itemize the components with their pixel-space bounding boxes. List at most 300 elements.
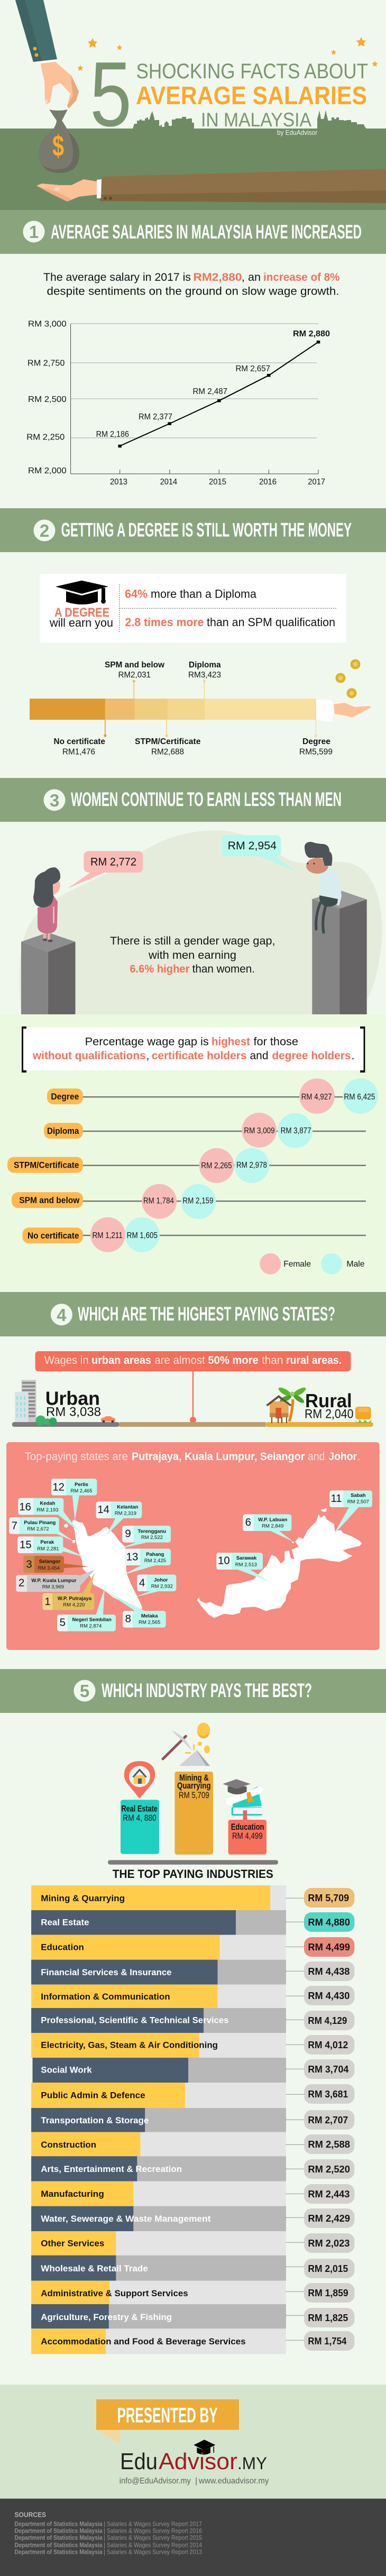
intro text: average salary: [43, 271, 339, 298]
row: arts, entertainment and recreation: Arts, Entertainment & Recreation: [41, 2164, 182, 2174]
panel: percentage wage gap note: highest: [212, 1035, 250, 1048]
callout: Selangor: RM 3,454: [38, 1565, 60, 1571]
callout: W.P. Putrajaya: 1: [44, 1596, 51, 1608]
chart: salary by qualification bar: [30, 659, 371, 757]
callout: Sabah: 11: [330, 1493, 342, 1505]
callout: W.P. Labuan: [243, 1514, 293, 1542]
callout: Pahang: RM 2,425: [144, 1558, 166, 1564]
row: agriculture, forestry and fishing: Agriculture, Forestry & Fishing: [41, 2312, 172, 2322]
label: rural salary: RM 2,040: [305, 1407, 353, 1421]
text: contact details: info@EduAdvisor.my: [120, 2477, 191, 2486]
text: gender wage gap: with men earning: [148, 949, 236, 961]
icon: city buildings: [15, 1380, 57, 1426]
row: water, sewerage and waste management: RM 2,429: [308, 2213, 350, 2224]
labels: qualification salaries: No certificate: [54, 737, 105, 746]
row: education: Education: [41, 1942, 84, 1952]
text: source list: |: [104, 2549, 105, 2556]
row: social work: Social Work: [41, 2065, 92, 2075]
callout: W.P. Labuan: W.P. Labuan: [258, 1517, 287, 1523]
panel: percentage wage gap note: [22, 1026, 365, 1072]
labels: qualification salaries: [54, 661, 333, 757]
row: agriculture, forestry and fishing: [31, 2304, 354, 2329]
banner: presented by: PRESENTED BY: [117, 2404, 218, 2427]
text: 64 percent more: 64%: [125, 587, 148, 600]
bar chart: top paying industries: [31, 1885, 354, 2354]
row: STPM/certificate: RM 2,978: [236, 1161, 267, 1170]
intro text: average salary: RM2,880: [194, 271, 242, 283]
callout: Melaka: RM 2,565: [139, 1620, 160, 1626]
callout: Pulau Pinang: Pulau Pinang: [24, 1520, 56, 1526]
row: diploma: [44, 1113, 313, 1148]
row: transportation and storage: Transportation & Storage: [41, 2115, 149, 2125]
callout: Sarawak: 10: [218, 1555, 230, 1567]
podium bar: mining and quarrying: [174, 1772, 213, 1855]
callout: Terengganu: Terengganu: [138, 1528, 166, 1534]
row: electricity, gas, steam and air conditioning: [31, 2033, 354, 2058]
row: wholesale and retail trade: RM 2,015: [308, 2263, 348, 2274]
callout: Kelantan: Kelantan: [117, 1505, 139, 1510]
text: top-paying states: Putrajaya, Kuala Lumpur, Selangor: [132, 1450, 305, 1463]
labels: qualification salaries: RM3,423: [188, 671, 221, 680]
icon: left pillar: [21, 932, 75, 1014]
line chart: average salary by year: RM 2,880: [293, 329, 330, 338]
row: accommodation and food and beverage services: RM 1,754: [308, 2335, 347, 2346]
diagram: urban and rural scene: [12, 1371, 373, 1427]
icon: city skyline: [133, 110, 366, 129]
callout: Perlis: 12: [52, 1481, 65, 1493]
text: source list: Salaries & Wages Survey Report 2017: [107, 2520, 202, 2528]
text: source list: Salaries & Wages Survey Report 2014: [107, 2542, 202, 2549]
row: manufacturing: RM 2,443: [308, 2188, 350, 2199]
label: rural salary: [305, 1390, 353, 1421]
row: social work: [33, 2058, 354, 2083]
row: electricity, gas, steam and air conditioning: Electricity, Gas, Steam & Air Conditioning: [41, 2040, 218, 2050]
line chart: average salary by year: RM 2,500: [28, 395, 67, 404]
row: professional, scientific and technical services: RM 4,129: [308, 2015, 347, 2026]
callout: Kedah: Kedah: [40, 1501, 56, 1507]
row: information and communication: RM 4,430: [308, 1990, 350, 2001]
row: other services: RM 2,023: [308, 2238, 350, 2249]
callout: urban vs rural wages: 50% more: [208, 1354, 259, 1367]
callout: Sabah: RM 2,507: [347, 1499, 369, 1505]
row: STPM/certificate: [7, 1148, 269, 1183]
chart: salary by gender and qualification: [7, 1078, 378, 1275]
row: real estate: Real Estate: [41, 1918, 89, 1928]
panel: percentage wage gap note: without qualifications: [32, 1049, 146, 1062]
text: contact details: [120, 2477, 269, 2486]
section 3 heading: [0, 778, 386, 822]
legend: Male: [347, 1260, 365, 1269]
icon: village house: [266, 1395, 292, 1423]
callout: Melaka: 8: [125, 1613, 131, 1625]
row: arts, entertainment and recreation: [31, 2156, 354, 2181]
text: top-paying states: [25, 1450, 360, 1463]
callout: Pahang: 13: [126, 1552, 138, 1563]
row: financial services and insurance: Financial Services & Insurance: [41, 1967, 171, 1977]
text: top-paying states: Top-paying states are: [25, 1450, 128, 1463]
callout: Negeri Sembilan: RM 2,874: [80, 1624, 102, 1629]
callout: Pahang: Pahang: [146, 1552, 164, 1557]
line chart: average salary by year: 2015: [209, 478, 226, 487]
row: transportation and storage: RM 2,707: [308, 2114, 348, 2125]
icon: car: [101, 1416, 115, 1423]
text: source list: Salaries & Wages Survey Report 2016: [107, 2527, 202, 2535]
icon: right pillar: [312, 890, 367, 1014]
text: a degree will earn you: A DEGREE: [54, 606, 109, 620]
callout: Pulau Pinang: [9, 1517, 73, 1541]
intro text: average salary: , an: [242, 271, 261, 283]
row: financial services and insurance: [31, 1960, 354, 1985]
callout: Kelantan: RM 2,319: [115, 1511, 136, 1517]
label: urban salary: [45, 1388, 101, 1419]
icon: upper arm and hand: [15, 0, 79, 108]
callout: Perlis: Perlis: [75, 1482, 88, 1488]
podium bar: real estate: Real Estate: [122, 1804, 158, 1814]
row: transportation and storage: [31, 2108, 354, 2132]
text: top-paying states: and: [308, 1450, 325, 1463]
callout: urban vs rural wages: Wages in: [44, 1354, 89, 1367]
callout: Selangor: [23, 1556, 89, 1573]
callout: Kedah: RM 2,193: [36, 1507, 59, 1513]
callout: W.P. Putrajaya: W.P. Putrajaya: [58, 1596, 92, 1601]
panel: percentage wage gap note: certificate holders: [152, 1049, 247, 1062]
map: East Malaysia with callouts: [197, 1490, 372, 1618]
text: 64 percent more: more than a Diploma: [151, 587, 257, 600]
text: source list: Department of Statistics Malaysia: [15, 2549, 103, 2556]
labels: qualification salaries: Diploma: [189, 661, 221, 670]
row: SPM and below: RM 1,784: [143, 1196, 174, 1205]
labels: qualification salaries: Degree: [302, 737, 330, 746]
callout: Kelantan: [96, 1501, 142, 1535]
callout: Negeri Sembilan: Negeri Sembilan: [72, 1617, 112, 1622]
callout: Sarawak: Sarawak: [236, 1555, 257, 1561]
row: degree: [47, 1078, 378, 1114]
row: no certificate: RM 1,605: [127, 1231, 158, 1240]
panel: percentage wage gap note: ,: [146, 1049, 149, 1062]
legend: [260, 1253, 365, 1275]
labels: qualification salaries: SPM and below: [105, 661, 165, 670]
panel: percentage wage gap note: for those: [254, 1035, 298, 1048]
line chart: average salary by year: [26, 320, 330, 487]
row: construction: RM 2,588: [308, 2139, 350, 2150]
line chart: average salary by year: RM 2,000: [28, 466, 67, 475]
line chart: average salary by year: RM 2,250: [26, 433, 65, 442]
icon: books and graduation cap: [223, 1779, 262, 1820]
legend: Female: [283, 1260, 311, 1269]
icon: graduation cap: [56, 581, 108, 604]
panel: percentage wage gap note: .: [351, 1049, 354, 1062]
callout: Negeri Sembilan: 5: [60, 1617, 66, 1628]
row: real estate: RM 4,880: [308, 1917, 350, 1928]
section 4 heading: 4: [57, 1305, 67, 1325]
label: urban salary: RM 3,038: [46, 1405, 101, 1419]
podium: top three industries: [108, 1723, 278, 1865]
callout: Johor: Johor: [154, 1577, 168, 1583]
callout: Melaka: Melaka: [141, 1614, 158, 1619]
text: gender wage gap: 6.6% higher: [130, 962, 190, 975]
row: water, sewerage and waste management: Water, Sewerage & Waste Management: [41, 2214, 211, 2224]
row: mining and quarrying: Mining & Quarrying: [41, 1893, 125, 1903]
section 2 heading: 2: [40, 521, 49, 540]
row: diploma: Diploma: [47, 1126, 79, 1136]
line chart: average salary by year: RM 3,000: [28, 320, 67, 329]
callout: female salary: [68, 851, 143, 888]
callout: urban vs rural wages: than: [262, 1354, 283, 1367]
podium bar: real estate: [121, 1800, 159, 1854]
callout: Pahang: [123, 1548, 171, 1575]
text: a degree will earn you: [49, 606, 113, 629]
podium bar: education: Education: [231, 1822, 264, 1832]
row: professional, scientific and technical services: [31, 2008, 354, 2033]
callout: Sarawak: [216, 1553, 269, 1582]
section 2 heading: [0, 508, 386, 552]
text: gender wage gap: than women.: [192, 962, 255, 975]
row: diploma: RM 3,009: [244, 1126, 275, 1135]
callout: Pulau Pinang: RM 2,672: [27, 1526, 49, 1532]
text: top-paying states: .: [357, 1450, 360, 1463]
row: degree: RM 4,927: [301, 1093, 332, 1102]
labels: qualification salaries: RM5,599: [299, 748, 333, 757]
row: degree: Degree: [51, 1092, 79, 1102]
row: SPM and below: SPM and below: [19, 1195, 80, 1205]
text: source list: Department of Statistics Malaysia: [15, 2520, 103, 2528]
line chart: average salary by year: 2013: [110, 478, 127, 487]
banner: presented by: [96, 2399, 239, 2444]
text: source list: |: [104, 2542, 105, 2549]
callout: W.P. Labuan: RM 2,849: [262, 1523, 283, 1529]
row: other services: [31, 2231, 354, 2256]
labels: qualification salaries: RM2,031: [118, 671, 151, 680]
label: rural salary: Rural: [305, 1390, 352, 1411]
callout: Perak: RM 2,281: [37, 1546, 59, 1552]
row: administrative and support services: Administrative & Support Services: [41, 2288, 188, 2298]
section 3 heading: 3: [50, 791, 59, 810]
row: construction: Construction: [41, 2140, 96, 2150]
section 1 heading: 1: [29, 222, 39, 242]
callout: Perlis: RM 2,465: [70, 1488, 93, 1494]
callout: Selangor: Selangor: [39, 1559, 61, 1565]
callout: urban vs rural wages: rural areas.: [286, 1354, 342, 1367]
hero panel: [0, 0, 386, 210]
panel: gender wage gap illustration: [0, 830, 386, 1292]
row: real estate: [31, 1910, 354, 1935]
text: source list: Salaries & Wages Survey Report 2013: [107, 2549, 202, 2556]
hero ground: [0, 129, 386, 210]
row: public admin and defence: Public Admin & Defence: [41, 2091, 145, 2101]
row: construction: [31, 2132, 354, 2156]
text: contact details: www.eduadvisor.my: [198, 2477, 269, 2486]
row: public admin and defence: [31, 2083, 354, 2108]
intro text: average salary: despite sentiments on the ground on slow wage growth.: [47, 285, 339, 298]
row: social work: RM 3,704: [308, 2064, 349, 2075]
icon: corn crop: [354, 1406, 372, 1423]
row: wholesale and retail trade: Wholesale & Retail Trade: [41, 2263, 148, 2274]
row: degree: RM 6,425: [344, 1093, 375, 1102]
line chart: average salary by year: 2014: [160, 478, 178, 487]
logo: EduAdvisor.my: Advisor: [159, 2449, 237, 2474]
row: information and communication: Information & Communication: [41, 1992, 170, 2002]
row: SPM and below: [12, 1184, 216, 1219]
section 4 heading: [0, 1292, 386, 1336]
heading: sources: SOURCES: [15, 2510, 46, 2518]
text: gender wage gap: There is still a gender wage gap,: [110, 934, 275, 947]
row: no certificate: No certificate: [27, 1231, 79, 1241]
byline: by EduAdvisor: [277, 129, 317, 136]
callout: Perlis: [51, 1479, 97, 1520]
icon: palm tree: [277, 1386, 307, 1422]
text: 2.8 times more: than an SPM qualification: [207, 616, 335, 629]
callout: W.P. Kuala Lumpur: 2: [19, 1577, 24, 1589]
text: gender wage gap: [110, 934, 275, 975]
row: information and communication: [31, 1985, 354, 2008]
podium bar: mining and quarrying: Quarrying: [177, 1781, 210, 1791]
callout: Perak: Perak: [40, 1539, 54, 1545]
text: source list: Department of Statistics Malaysia: [15, 2534, 103, 2542]
row: accommodation and food and beverage services: [31, 2329, 354, 2354]
icon: pickaxe, mountain and gold: [163, 1723, 210, 1766]
callout: Terengganu: RM 2,522: [141, 1535, 163, 1541]
line chart: average salary by year: RM 2,377: [139, 412, 172, 421]
icon: money bag: $: [52, 129, 64, 162]
callout: W.P. Kuala Lumpur: [16, 1570, 95, 1592]
callout: Melaka: [107, 1592, 166, 1628]
row: no certificate: [22, 1217, 160, 1252]
callout: Kelantan: 14: [97, 1504, 109, 1516]
row: financial services and insurance: RM 4,438: [308, 1966, 350, 1977]
text: source list: Department of Statistics Malaysia: [15, 2542, 103, 2549]
callout: urban vs rural wages: are almost: [154, 1354, 205, 1367]
text: source list: |: [104, 2520, 105, 2528]
row: STPM/certificate: RM 2,265: [201, 1161, 232, 1170]
icon: lower arm and hand: [36, 169, 386, 203]
section 1 heading: [0, 210, 386, 254]
label: urban salary: Urban: [45, 1388, 100, 1409]
heading: the top paying industries: THE TOP PAYING INDUSTRIES: [113, 1867, 273, 1881]
logo: EduAdvisor.my: .MY: [237, 2454, 267, 2473]
line chart: average salary by year: RM 2,487: [192, 387, 227, 396]
labels: qualification salaries: STPM/Certificate: [135, 737, 200, 746]
icon: hand catching coins: [316, 659, 371, 722]
title: 5: [90, 42, 132, 145]
intro text: average salary: The average salary in 2017 is: [43, 271, 191, 283]
text: contact details: |: [195, 2477, 197, 2486]
section 5 heading: 5: [80, 1681, 89, 1701]
row: water, sewerage and waste management: [31, 2206, 354, 2231]
callout: Terengganu: [120, 1526, 171, 1548]
text: a degree will earn you: will earn you: [49, 616, 113, 629]
callout: Kedah: 16: [19, 1501, 31, 1513]
text: source list: |: [104, 2534, 105, 2542]
row: SPM and below: RM 2,159: [182, 1196, 214, 1205]
panel: state salary map: [6, 1442, 380, 1650]
icon: stars: [77, 37, 378, 71]
callout: Sarawak: RM 2,513: [235, 1562, 257, 1568]
callout: Selangor: 3: [26, 1559, 32, 1570]
callout: Sabah: [329, 1490, 372, 1535]
panel: sources footer: [0, 2498, 386, 2576]
row: professional, scientific and technical services: Professional, Scientific & Technical Services: [41, 2015, 229, 2025]
callout: urban vs rural wages: urban areas: [91, 1354, 151, 1367]
icon: property pin: [124, 1761, 155, 1799]
text: 2.8 times more: 2.8 times more: [125, 616, 204, 629]
callout: Perak: 15: [20, 1539, 32, 1551]
callout: W.P. Labuan: 6: [245, 1517, 251, 1528]
icon: woman: [33, 867, 60, 942]
title: IN MALAYSIA: [201, 109, 311, 131]
line chart: average salary by year: RM 2,657: [236, 364, 270, 373]
callout: Johor: [133, 1574, 176, 1598]
row: administrative and support services: RM 1,859: [308, 2287, 348, 2298]
title: [90, 42, 368, 145]
callout: urban vs rural wages: [35, 1351, 351, 1371]
row: electricity, gas, steam and air conditioning: RM 4,012: [308, 2039, 348, 2050]
row: agriculture, forestry and fishing: RM 1,825: [308, 2312, 348, 2323]
row: education: [31, 1935, 354, 1960]
panel: degree earnings comparison: [40, 574, 346, 643]
line chart: average salary by year: 2017: [308, 478, 325, 487]
row: STPM/certificate: STPM/Certificate: [14, 1160, 79, 1170]
row: diploma: RM 3,877: [281, 1126, 311, 1135]
row: public admin and defence: RM 3,681: [308, 2088, 348, 2100]
callout: Negeri Sembilan: [57, 1588, 116, 1631]
text: source list: [15, 2520, 202, 2556]
logo: EduAdvisor.my: Edu: [120, 2449, 158, 2474]
callout: Perak: [17, 1536, 86, 1557]
intro text: average salary: increase of 8%: [263, 271, 339, 283]
row: accommodation and food and beverage services: Accommodation and Food & Beverage Services: [41, 2336, 246, 2346]
callout: Kedah: [18, 1498, 79, 1532]
callout: Johor: 4: [139, 1577, 145, 1589]
row: education: RM 4,499: [308, 1941, 350, 1952]
row: arts, entertainment and recreation: RM 2,520: [308, 2164, 350, 2175]
panel: percentage wage gap note: and: [250, 1049, 269, 1062]
callout: W.P. Kuala Lumpur: W.P. Kuala Lumpur: [31, 1578, 77, 1583]
callout: Sabah: Sabah: [351, 1492, 366, 1498]
callout: female salary: RM 2,772: [90, 856, 136, 868]
row: other services: Other Services: [41, 2239, 104, 2249]
icon: money bag: [39, 109, 79, 173]
text: 2.8 times more: [125, 616, 335, 629]
podium bar: real estate: RM 4, 880: [123, 1813, 157, 1823]
row: no certificate: RM 1,211: [93, 1231, 123, 1240]
section 5 heading: [0, 1669, 386, 1713]
callout: W.P. Putrajaya: RM 4,220: [63, 1602, 85, 1608]
panel: percentage wage gap note: Percentage wage gap is: [85, 1035, 209, 1048]
callout: Johor: RM 2,932: [151, 1584, 173, 1590]
row: manufacturing: Manufacturing: [41, 2189, 104, 2199]
podium bar: education: [228, 1820, 266, 1855]
icon: man: [305, 842, 342, 932]
labels: qualification salaries: RM2,688: [151, 748, 184, 757]
row: administrative and support services: [31, 2281, 354, 2304]
text: top-paying states: Johor: [329, 1450, 357, 1463]
text: source list: Department of Statistics Malaysia: [15, 2527, 103, 2535]
row: mining and quarrying: RM 5,709: [308, 1892, 349, 1903]
podium bar: education: RM 4,499: [232, 1831, 263, 1841]
callout: Pulau Pinang: 7: [12, 1520, 17, 1532]
row: manufacturing: [31, 2181, 354, 2206]
line chart: average salary by year: 2016: [259, 478, 277, 487]
row: mining and quarrying: [31, 1885, 354, 1910]
callout: W.P. Putrajaya: [42, 1572, 95, 1610]
callout: male salary: [222, 835, 297, 873]
text: source list: Salaries & Wages Survey Report 2015: [107, 2534, 202, 2542]
callout: male salary: RM 2,954: [228, 839, 277, 852]
row: wholesale and retail trade: [31, 2256, 354, 2281]
map: peninsular Malaysia with callouts: [9, 1479, 176, 1631]
podium bar: mining and quarrying: Mining &: [179, 1773, 209, 1783]
panel: presented by: [0, 2385, 386, 2498]
